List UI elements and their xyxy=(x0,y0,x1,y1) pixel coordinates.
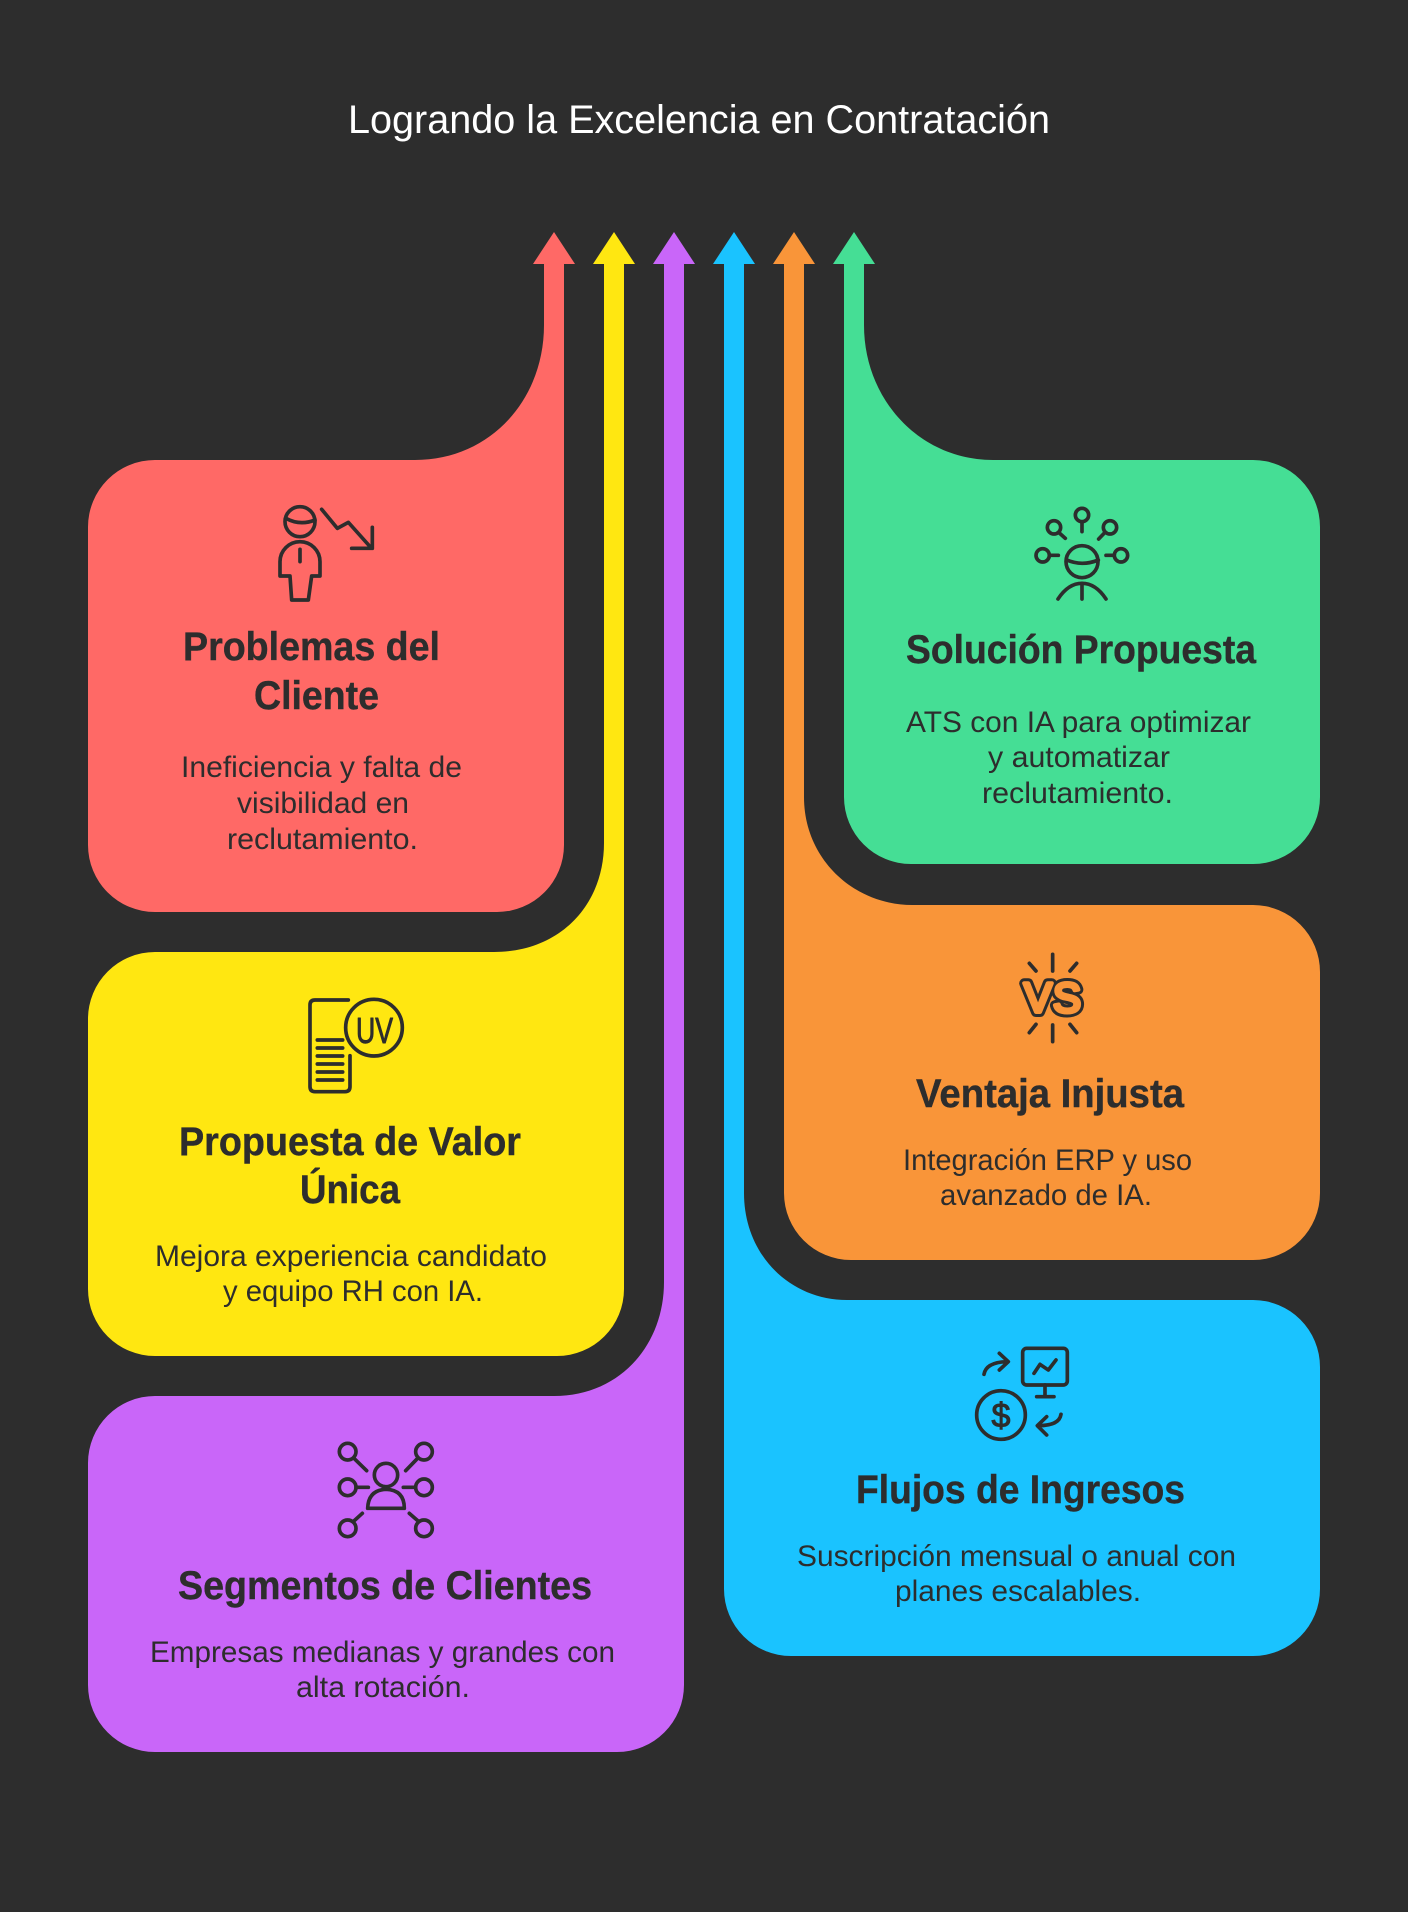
icon: VS burst: VS xyxy=(1024,974,1081,1021)
panel: Problemas del Cliente xyxy=(88,232,575,912)
icon: person with falling trend xyxy=(280,507,372,600)
icon: person network xyxy=(339,1443,432,1537)
description: avanzado de IA. xyxy=(940,1179,1152,1212)
description: y automatizar xyxy=(988,741,1170,774)
heading: Propuesta de Valor xyxy=(179,1120,521,1164)
description xyxy=(903,1144,1192,1212)
panel: Propuesta de Valor Única xyxy=(88,232,635,1356)
description xyxy=(155,1240,547,1308)
heading: Cliente xyxy=(254,674,379,718)
description: Suscripción mensual o anual con xyxy=(797,1540,1236,1573)
description: Mejora experiencia candidato xyxy=(155,1240,547,1273)
description xyxy=(181,751,462,856)
icon: document with UV badge xyxy=(310,999,402,1092)
heading: Problemas del xyxy=(183,625,440,669)
panel: Flujos de Ingresos xyxy=(713,232,1320,1656)
icon: VS burst xyxy=(1024,954,1081,1042)
icon: revenue flow xyxy=(977,1348,1067,1439)
red arrow card shape xyxy=(88,232,575,912)
icon: person with idea nodes xyxy=(1036,508,1128,599)
description: Ineficiencia y falta de xyxy=(181,751,462,784)
blue arrow card shape xyxy=(713,232,1320,1656)
description: visibilidad en xyxy=(237,787,409,820)
description: y equipo RH con IA. xyxy=(223,1275,483,1308)
icon: revenue flow: $ xyxy=(992,1397,1011,1435)
icon: document with UV badge: UV xyxy=(356,1010,393,1051)
heading xyxy=(183,625,440,718)
orange arrow card shape xyxy=(773,232,1320,1260)
description: planes escalables. xyxy=(895,1575,1141,1608)
yellow arrow card shape xyxy=(88,232,635,1356)
purple arrow card shape xyxy=(88,232,695,1752)
description xyxy=(906,706,1251,810)
description xyxy=(797,1540,1236,1608)
icon: VS burst: VS xyxy=(1024,974,1081,1021)
panel: Ventaja Injusta xyxy=(773,232,1320,1260)
heading: Flujos de Ingresos xyxy=(856,1468,1185,1512)
heading: Segmentos de Clientes xyxy=(178,1564,592,1608)
title: Logrando la Excelencia en Contratación xyxy=(348,98,1050,142)
description: alta rotación. xyxy=(296,1671,470,1704)
panel: Solución Propuesta xyxy=(833,232,1320,864)
heading: Ventaja Injusta xyxy=(916,1072,1185,1116)
green arrow card shape xyxy=(833,232,1320,864)
panel: Segmentos de Clientes xyxy=(88,232,695,1752)
description: ATS con IA para optimizar xyxy=(906,706,1251,739)
description xyxy=(150,1636,615,1704)
description: reclutamiento. xyxy=(982,777,1173,810)
description: reclutamiento. xyxy=(227,823,418,856)
description: Empresas medianas y grandes con xyxy=(150,1636,615,1669)
heading: Única xyxy=(300,1166,401,1212)
heading xyxy=(179,1120,521,1212)
heading: Solución Propuesta xyxy=(906,628,1257,672)
description: Integración ERP y uso xyxy=(903,1144,1192,1177)
